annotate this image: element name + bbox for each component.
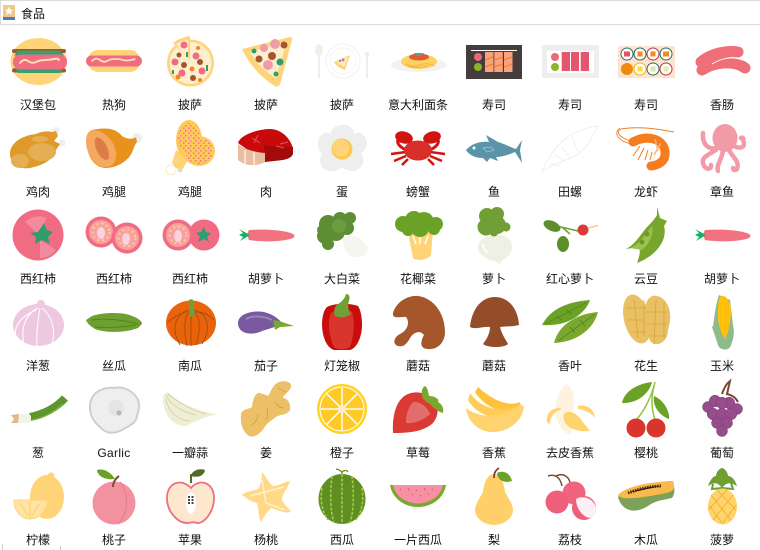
icon: hot dog: [86, 50, 142, 72]
label: 柠檬: [26, 532, 50, 547]
icon: strawberry: [393, 386, 443, 433]
icon: river snail shell: [542, 126, 598, 171]
icon: chicken drumstick: [166, 120, 215, 175]
icon: orange slice: [317, 384, 367, 434]
icon: red radish: [542, 218, 598, 252]
label: 花生: [634, 358, 658, 373]
icon: onion: [13, 300, 64, 346]
label: 寿司: [482, 98, 506, 112]
icon: carrot: [695, 229, 750, 241]
icon: loofah: [86, 313, 142, 332]
label: 葡萄: [710, 446, 734, 460]
icon: fried egg: [318, 125, 367, 171]
title: 食品: [21, 6, 45, 21]
label: 寿司: [558, 98, 582, 112]
label: 汉堡包: [20, 97, 56, 112]
label: 蛋: [336, 185, 348, 199]
label: 云豆: [634, 272, 658, 286]
label: 西红柿: [172, 271, 208, 286]
label: 菠萝: [710, 533, 734, 547]
icon: bok choy: [317, 212, 368, 257]
label: 荔枝: [558, 532, 582, 547]
label: 蘑菇: [406, 359, 430, 373]
label: 螃蟹: [406, 184, 430, 199]
label: 一瓣蒜: [172, 446, 208, 460]
label: 姜: [260, 446, 272, 460]
label: 披萨: [178, 98, 202, 112]
label: 西红柿: [96, 271, 132, 286]
icon: pea pod: [626, 207, 667, 263]
label: 披萨: [254, 98, 278, 112]
label: 热狗: [102, 98, 126, 112]
icon: tuna fish: [466, 135, 522, 163]
icon: mushroom side: [393, 296, 445, 349]
label: 香蕉: [482, 446, 506, 460]
icon: sushi rolls: [618, 46, 675, 78]
icon: star fruit: [242, 472, 291, 522]
label: 葱: [32, 446, 44, 460]
label: 花椰菜: [400, 271, 436, 286]
label: 一片西瓜: [394, 533, 442, 547]
label: 西瓜: [330, 533, 354, 547]
icon: burger: [10, 38, 67, 85]
label: 胡萝卜: [248, 272, 284, 286]
icon: mushroom: [470, 297, 519, 347]
icon: ham leg: [86, 128, 142, 168]
icon: peanuts: [618, 292, 670, 346]
icon: lychee: [546, 475, 596, 520]
label: 鱼: [488, 185, 500, 199]
icon: tomato halves: [86, 216, 142, 254]
label: 肉: [260, 185, 272, 199]
icon: peeled banana: [547, 384, 595, 435]
icon: bell pepper: [322, 294, 362, 350]
icon: carrot: [239, 229, 294, 241]
icon: ginger: [241, 381, 291, 437]
icon: pizza slice: [242, 37, 292, 87]
label: 蘑菇: [482, 359, 506, 373]
label: 杨桃: [254, 532, 278, 547]
icon: grapes: [702, 381, 742, 436]
label: 寿司: [634, 98, 658, 112]
label: 丝瓜: [102, 359, 126, 373]
icon: tomato half and whole: [162, 220, 220, 250]
icon: bananas: [466, 387, 524, 432]
label: 草莓: [406, 446, 430, 460]
icon: crab: [391, 129, 445, 165]
label: 萝卜: [482, 272, 506, 286]
icon: tomato: [12, 210, 64, 260]
label: 桃子: [102, 532, 126, 547]
label: 苹果: [178, 533, 202, 547]
icon: sushi grey tray: [542, 45, 599, 78]
icon: bay leaves: [542, 300, 598, 343]
label: 香肠: [710, 98, 734, 112]
label: 玉米: [710, 359, 734, 373]
icon: raw meat: [238, 129, 293, 165]
label: 胡萝卜: [704, 272, 740, 286]
icon: papaya: [618, 481, 674, 511]
label: 去皮香蕉: [546, 446, 594, 460]
icon: pizza on plate: [315, 44, 369, 78]
icon: broccoli: [395, 211, 443, 260]
icon: spaghetti: [391, 53, 447, 72]
icon: roast chicken: [10, 127, 65, 168]
label: 田螺: [558, 185, 582, 199]
label: 鸡腿: [178, 184, 202, 199]
icon: lemon: [14, 472, 64, 519]
icon: white radish: [478, 207, 512, 264]
label: 章鱼: [710, 184, 734, 199]
icon: pizza whole: [167, 36, 214, 86]
icon: shrimp: [617, 128, 674, 166]
label: 橙子: [330, 445, 354, 460]
label: 大白菜: [324, 271, 360, 286]
icon: sushi dark tray: [466, 45, 522, 79]
label: 鸡肉: [26, 184, 50, 199]
label: 西红柿: [20, 271, 56, 286]
icon: octopus: [703, 124, 744, 171]
label: 木瓜: [634, 533, 658, 547]
label: 香叶: [558, 359, 582, 373]
icon: eggplant: [238, 311, 294, 334]
icon: pear: [475, 468, 513, 525]
label: 灯笼椒: [324, 358, 360, 373]
icon: watermelon: [318, 469, 366, 524]
label: 茄子: [254, 359, 278, 373]
icon: scallion: [11, 398, 65, 423]
icon: pineapple: [708, 468, 737, 524]
icon: apple half: [167, 469, 214, 523]
label: 意大利面条: [388, 97, 448, 112]
icon: garlic: [90, 387, 139, 433]
label: 南瓜: [178, 358, 202, 373]
icon: garlic clove: [163, 392, 218, 426]
label: Garlic: [97, 446, 131, 460]
header icon: [3, 5, 15, 20]
icon: watermelon slice: [390, 485, 446, 507]
icon: cherries: [622, 382, 669, 438]
label: 洋葱: [26, 358, 50, 373]
icon: corn: [712, 295, 734, 350]
icon: pumpkin: [166, 299, 216, 346]
label: 樱桃: [634, 445, 658, 460]
icon: sausage: [701, 51, 745, 70]
label: 鸡腿: [102, 184, 126, 199]
icon: peach: [92, 469, 136, 524]
label: 梨: [488, 533, 500, 547]
label: 披萨: [330, 98, 354, 112]
label: 龙虾: [634, 185, 658, 199]
label: 红心萝卜: [546, 271, 594, 286]
